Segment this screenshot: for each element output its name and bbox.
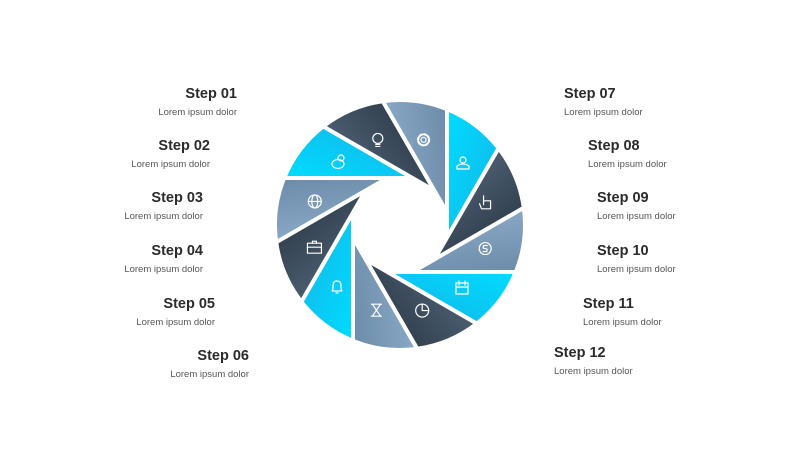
blade 12: gear xyxy=(383,75,492,212)
step 02: Lorem ipsum dolor xyxy=(131,159,210,170)
blade 4: calendar xyxy=(387,272,516,324)
step 08: Lorem ipsum dolor xyxy=(588,159,667,170)
step 01 xyxy=(158,86,237,118)
blade 3: dollar xyxy=(413,208,550,317)
step 11 xyxy=(583,296,662,328)
step 08 xyxy=(588,138,667,170)
step 09: Step 09 xyxy=(597,190,649,206)
blade 7: bell xyxy=(301,212,353,341)
step 12 xyxy=(554,345,633,377)
blade 2: hand xyxy=(434,148,543,285)
step 05 xyxy=(136,296,215,328)
blade 8: briefcase xyxy=(257,165,366,302)
step 12: Step 12 xyxy=(554,345,606,361)
step 11: Lorem ipsum dolor xyxy=(583,317,662,328)
step 07: Step 07 xyxy=(564,86,616,102)
step 08: Step 08 xyxy=(588,138,640,154)
step 05: Step 05 xyxy=(163,296,215,312)
step 04: Step 04 xyxy=(151,243,203,259)
blade 11: light bulb xyxy=(323,82,460,191)
step 03: Lorem ipsum dolor xyxy=(124,211,203,222)
step 09: Lorem ipsum dolor xyxy=(597,211,676,222)
step 04 xyxy=(124,243,203,275)
step 01: Step 01 xyxy=(185,86,237,102)
step 02 xyxy=(131,138,210,170)
blade 9: globe xyxy=(250,133,387,242)
step 06: Step 06 xyxy=(197,348,249,364)
step 02: Step 02 xyxy=(158,138,210,154)
step 10: Step 10 xyxy=(597,243,649,259)
step 09 xyxy=(597,190,676,222)
step 04: Lorem ipsum dolor xyxy=(124,264,203,275)
blade 6: hourglass xyxy=(308,238,417,375)
step 07: Lorem ipsum dolor xyxy=(564,107,643,118)
step 10: Lorem ipsum dolor xyxy=(597,264,676,275)
blade 10: piggy bank xyxy=(284,126,413,178)
step 10 xyxy=(597,243,676,275)
step 05: Lorem ipsum dolor xyxy=(136,317,215,328)
step 11: Step 11 xyxy=(583,296,634,312)
step 06: Lorem ipsum dolor xyxy=(170,369,249,380)
step 12: Lorem ipsum dolor xyxy=(554,366,633,377)
blade 5: pie chart xyxy=(340,259,477,368)
step 06 xyxy=(170,348,249,380)
step 07 xyxy=(564,86,643,118)
step 03: Step 03 xyxy=(151,190,203,206)
blade 1: person xyxy=(447,109,499,238)
step 01: Lorem ipsum dolor xyxy=(158,107,237,118)
step 03 xyxy=(124,190,203,222)
